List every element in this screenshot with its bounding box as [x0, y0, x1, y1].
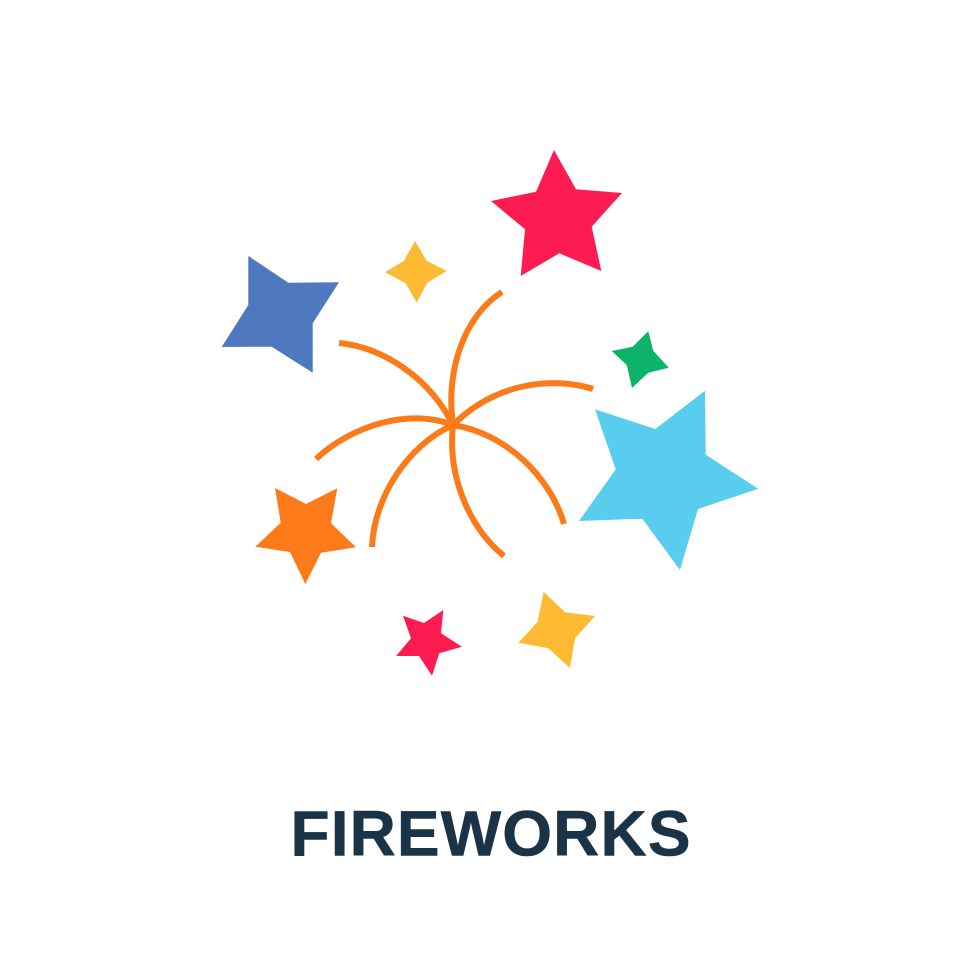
icon: red star top [491, 150, 622, 276]
icon: yellow sparkle [385, 241, 447, 303]
icon: light blue star [579, 391, 758, 570]
icon: red small star [396, 610, 462, 676]
icon: orange burst arcs [316, 292, 593, 556]
icon: blue star left [222, 256, 339, 373]
icon: orange star [255, 488, 356, 584]
title: FIREWORKS [290, 798, 690, 870]
icon: green sparkle [612, 331, 669, 388]
icon: yellow star bottom [518, 592, 595, 668]
